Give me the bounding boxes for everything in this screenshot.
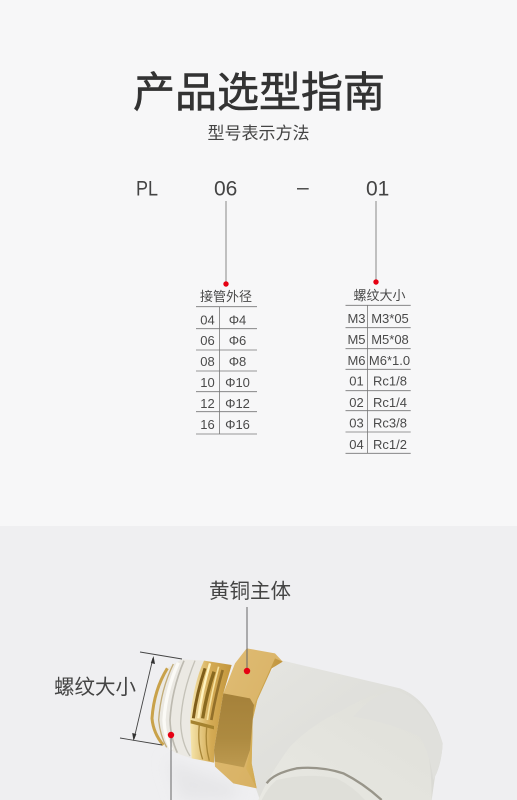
end cap <box>262 776 365 800</box>
thread group <box>151 648 283 788</box>
callout line: 06 to tube diameter table <box>223 201 229 287</box>
callout: thread size dimension: 螺纹大小 <box>54 670 136 700</box>
table: tube outer diameter: 06 <box>200 333 215 348</box>
table: tube outer diameter: 接管外径 <box>200 286 252 305</box>
table: thread size: M6*1.0 <box>369 353 410 368</box>
elbow right lobe <box>353 689 443 780</box>
tape wrapped thread <box>151 659 232 763</box>
bottom background panel <box>0 526 517 800</box>
subtitle: 型号表示方法 <box>208 119 310 144</box>
title: 产品选型指南 <box>133 59 385 120</box>
photo: brass elbow fitting <box>151 648 443 800</box>
model code: PL 06 - 01: 06 <box>214 178 237 200</box>
table: thread size: M3*05 <box>371 311 409 326</box>
table: tube outer diameter: 16 <box>200 417 215 432</box>
top background panel <box>0 0 517 526</box>
model code: PL 06 - 01: 01 <box>366 178 389 200</box>
white plastic body <box>250 660 443 800</box>
table: tube outer diameter <box>196 286 257 434</box>
callout: thread size dimension <box>54 652 182 745</box>
callout line: 01 to thread size table <box>373 201 379 285</box>
table: tube outer diameter: 10 <box>200 375 215 390</box>
table: thread size: Rc3/8 <box>373 416 407 430</box>
table: thread size: Rc1/8 <box>373 374 407 388</box>
callout: brass body: 黄铜主体 <box>209 574 291 604</box>
table: thread size: Rc1/4 <box>373 395 407 410</box>
table: tube outer diameter: 08 <box>200 354 215 369</box>
callout marker: thread <box>168 732 174 800</box>
table: thread size: 02 <box>349 395 364 410</box>
table: thread size: M5*08 <box>371 332 409 347</box>
table: tube outer diameter: Φ8 <box>229 354 246 369</box>
table: tube outer diameter: Φ4 <box>229 312 246 328</box>
table: thread size: 04 <box>349 437 364 452</box>
table: thread size: 01 <box>349 374 364 388</box>
elbow front <box>258 690 432 800</box>
table: tube outer diameter: Φ6 <box>229 333 246 348</box>
hex front facet <box>214 693 254 767</box>
table: tube outer diameter: 04 <box>200 312 215 328</box>
model code: PL 06 - 01: PL <box>136 178 158 200</box>
table: thread size: 03 <box>349 416 364 430</box>
table: thread size: M3 <box>347 311 366 326</box>
table: tube outer diameter: Φ10 <box>225 375 250 390</box>
hex nut silhouette <box>214 648 283 788</box>
table: tube outer diameter: 12 <box>200 396 215 411</box>
table: tube outer diameter: Φ16 <box>225 417 250 432</box>
callout: brass body <box>209 574 291 674</box>
table: thread size: 螺纹大小 <box>353 285 406 304</box>
hex right facet <box>246 658 283 788</box>
model code: PL 06 - 01 <box>136 176 389 200</box>
table: thread size: M5 <box>347 332 366 347</box>
brass neck <box>190 661 232 763</box>
table: thread size <box>346 285 411 453</box>
model code: PL 06 - 01: – <box>297 176 309 199</box>
table: tube outer diameter: Φ12 <box>225 396 250 411</box>
table: thread size: Rc1/2 <box>373 437 407 452</box>
dark ring <box>267 768 382 800</box>
table: thread size: M6 <box>347 353 366 368</box>
